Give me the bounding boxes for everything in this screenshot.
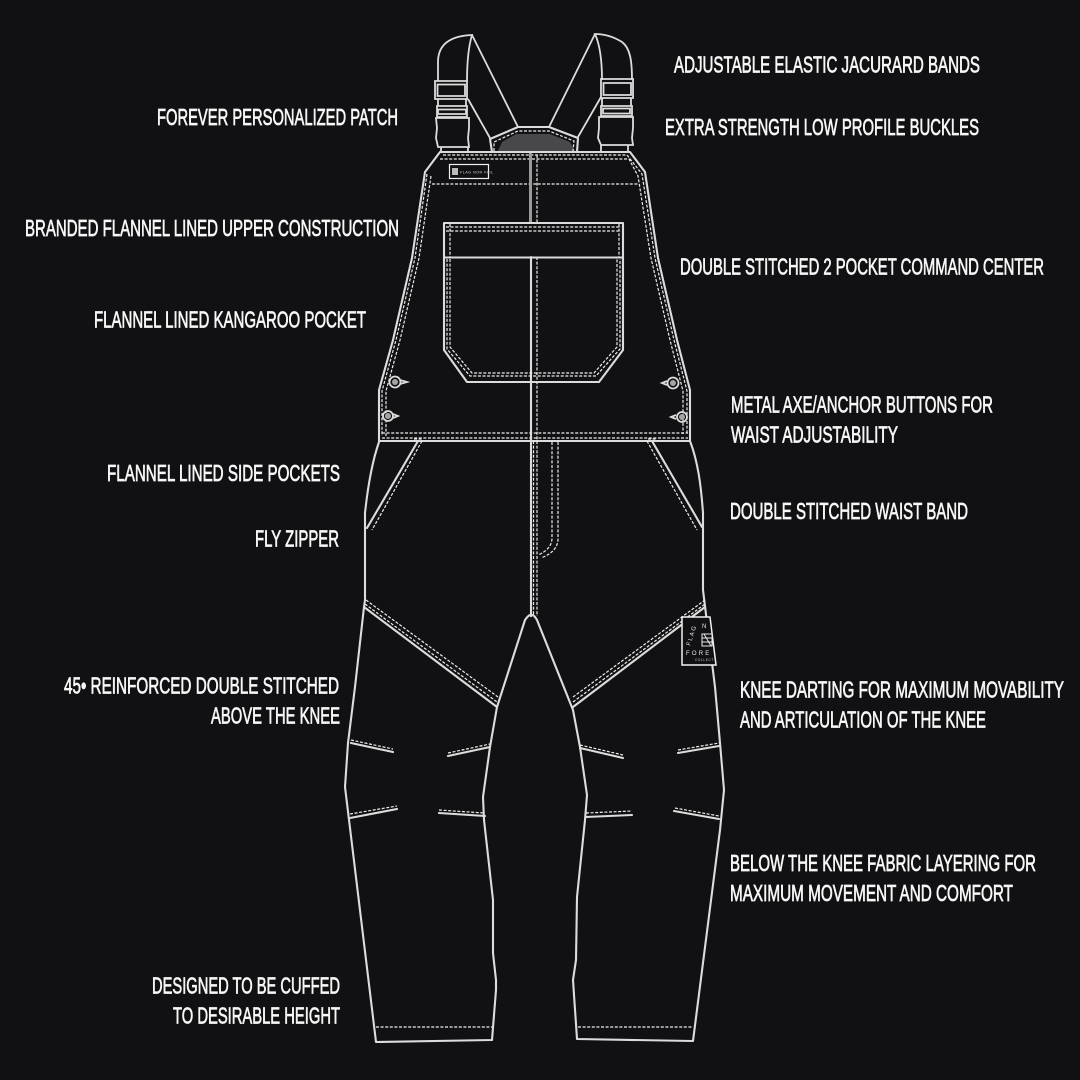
leg patch: FORE [686,651,711,657]
label: reinforced stitching: ABOVE THE KNEE [211,702,340,728]
label: side pockets: FLANNEL LINED SIDE POCKETS [107,460,340,486]
center seam [530,153,537,616]
left strap [438,35,518,138]
above knee seams [364,600,705,707]
bib label patch [450,164,493,178]
leg patch: FLAG [686,624,699,647]
right leg outline [531,441,724,1041]
right buckle [598,79,633,152]
label: kangaroo pocket: FLANNEL LINED KANGAROO POCKET [94,306,366,332]
labels: right column [665,52,1064,906]
knee darts [350,740,719,819]
label: cuffed [152,972,340,1028]
bib stitching [382,155,688,438]
label: cuffed: TO DESIRABLE HEIGHT [173,1002,340,1028]
neck panel [490,127,578,152]
fly zipper [538,442,558,558]
side pockets [367,439,702,530]
label: upper construction: BRANDED FLANNEL LINED UPPER CONSTRUCTION [25,215,399,241]
bib outline [379,152,690,441]
cuff stitching [376,1026,693,1028]
bib label patch: FLAG NOR FAIL [460,170,493,174]
leg patch: COLLECT [695,658,714,662]
right strap [549,34,632,137]
label: metal buttons [731,392,993,448]
leg patch [682,617,716,665]
label: patch: FOREVER PERSONALIZED PATCH [157,104,398,130]
left buckle [435,81,469,152]
labels: left column [25,104,399,1028]
chest pocket [444,223,623,382]
label: fly zipper: FLY ZIPPER [255,526,339,552]
label: knee darting [740,676,1064,732]
label: reinforced stitching: 45• REINFORCED DOUBLE STITCHED [64,672,339,698]
left leg outline [345,442,531,1042]
label: cuffed: DESIGNED TO BE CUFFED [152,972,340,998]
label: reinforced stitching [64,672,340,728]
label: metal buttons: WAIST ADJUSTABILITY [731,422,898,448]
overalls technical drawing [345,34,724,1042]
buttons [383,376,687,422]
leg patch: N [702,624,706,630]
label: fabric layering [730,850,1036,906]
